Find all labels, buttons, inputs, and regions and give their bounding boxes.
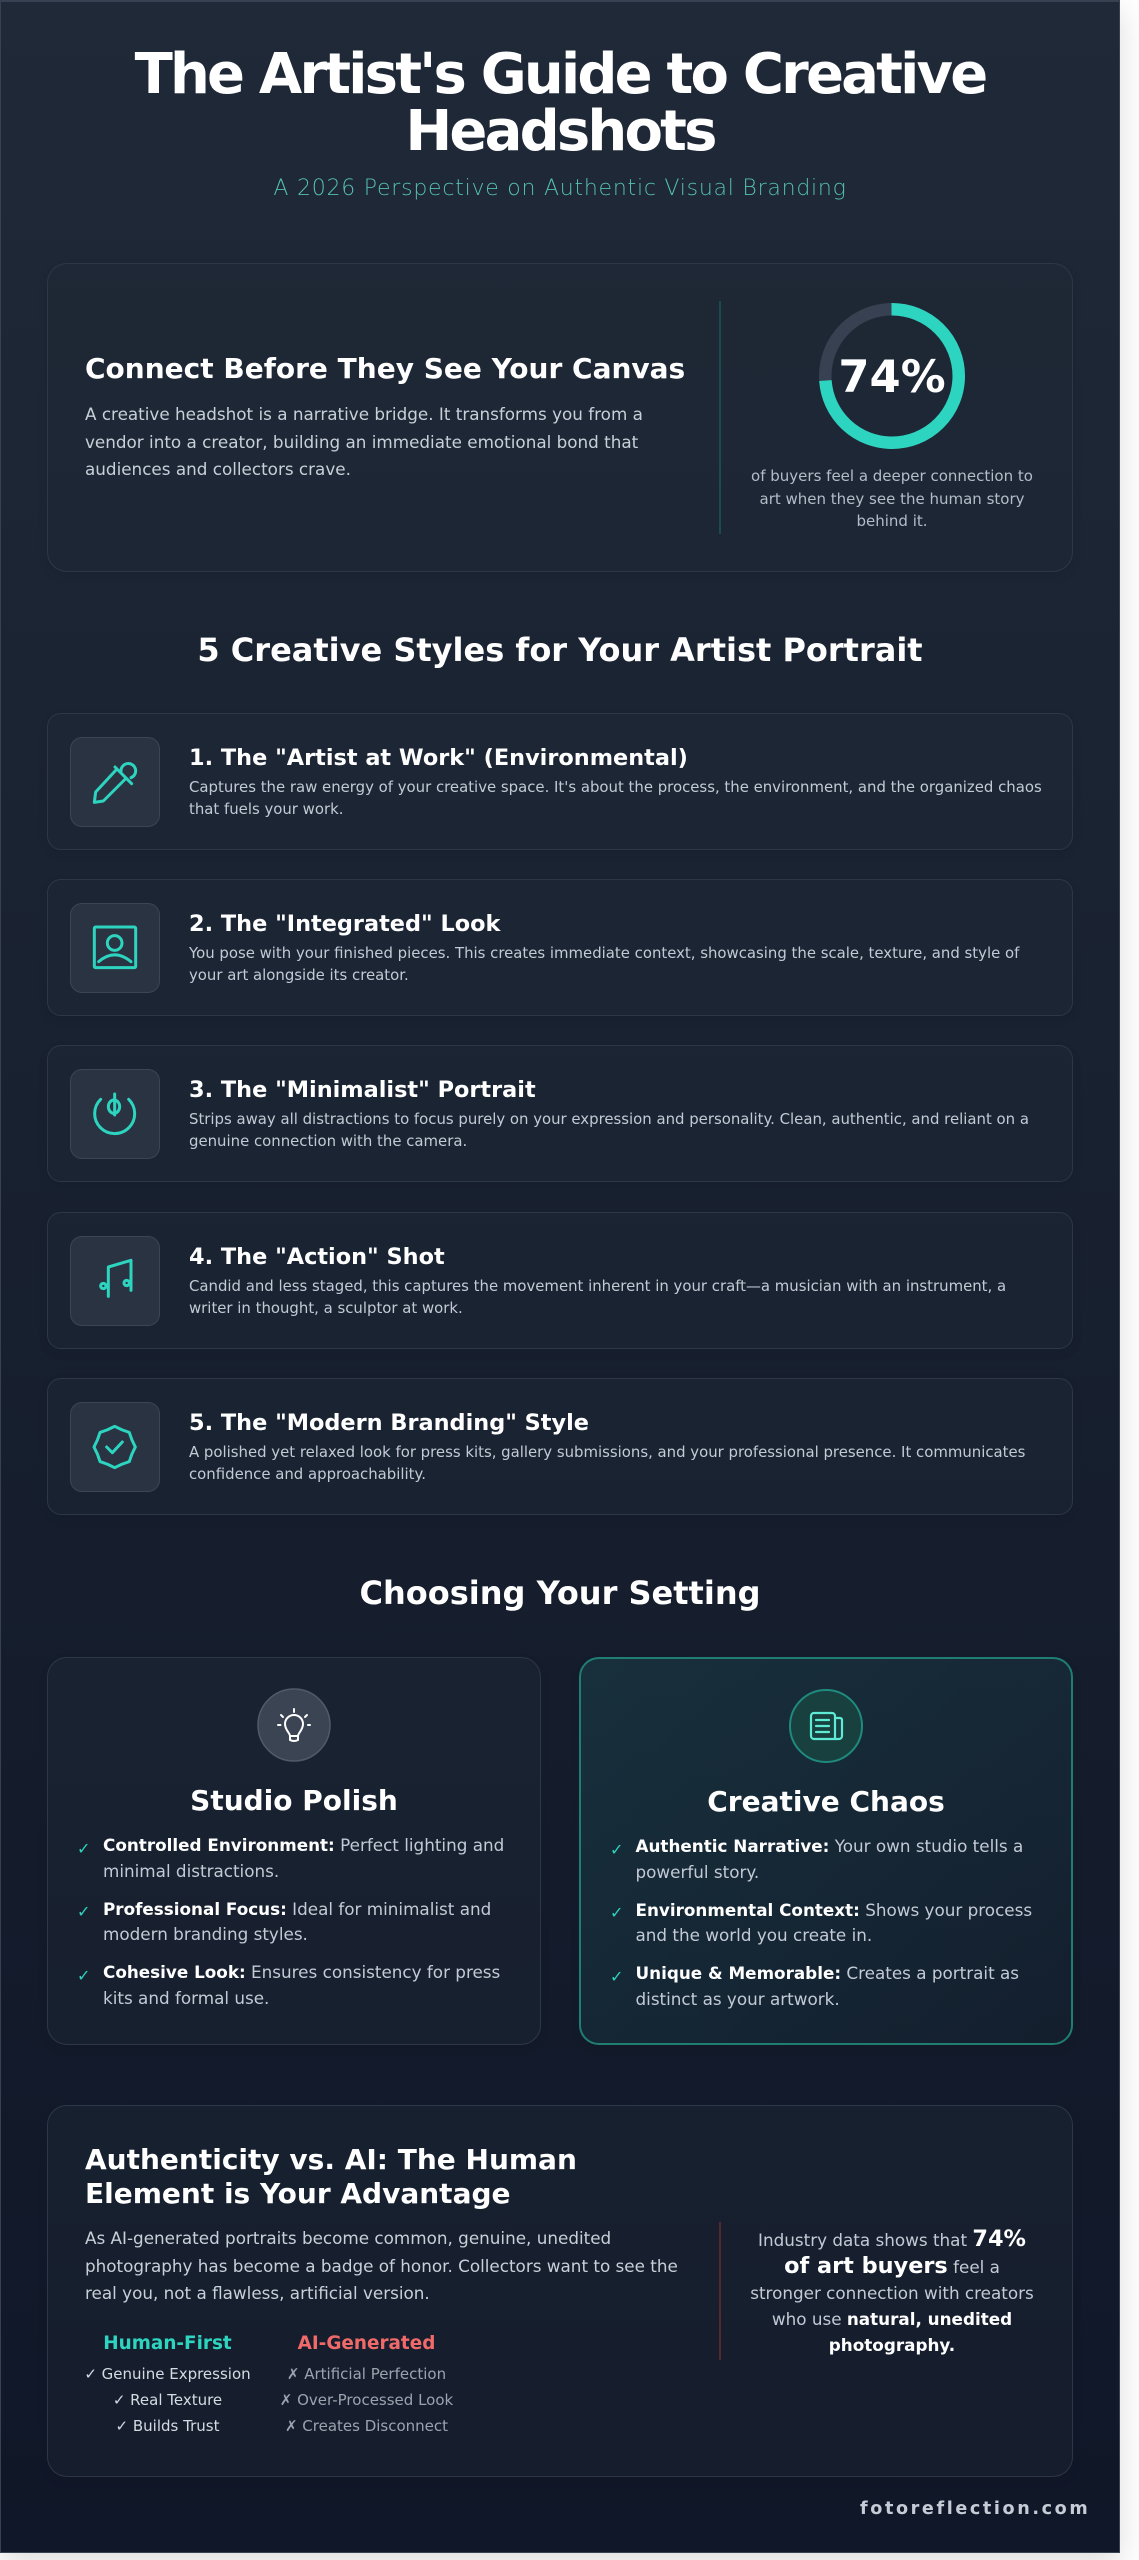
human-first list (84, 2365, 251, 2435)
chaos check 2: ✓ (610, 1903, 623, 1922)
stat caption: art when they see the human story (760, 490, 1024, 508)
style text 4: writer in thought, a sculptor at work. (189, 1299, 463, 1317)
style text 2: your art alongside its creator. (189, 966, 409, 984)
chaos list: Authentic Narrative: Your own studio tells a (636, 1836, 1023, 1856)
style card 5 (47, 1378, 1073, 1515)
human-first label: Human-First (103, 2333, 232, 2354)
authenticity text (85, 2228, 678, 2303)
divider (719, 301, 721, 534)
style title 5: 5. The "Modern Branding" Style (189, 1410, 589, 1436)
style text 4: Candid and less staged, this captures the movement inherent in your craft—a musician with an instrument, a (189, 1277, 1006, 1295)
heading: styles: 5 Creative Styles for Your Artist Portrait (197, 631, 923, 669)
style text 5: confidence and approachability. (189, 1465, 426, 1483)
human-first list: ✓ Builds Trust (116, 2417, 219, 2435)
authenticity heading: Authenticity vs. AI: The Human (85, 2143, 577, 2176)
intro text (85, 404, 643, 479)
authenticity text: photography has become a badge of honor. Collectors want to see the (85, 2256, 678, 2276)
intro text: A creative headshot is a narrative bridge. It transforms you from a (85, 404, 643, 424)
style title 3: 3. The "Minimalist" Portrait (189, 1077, 536, 1103)
style text 4 (189, 1277, 1006, 1317)
human-first list: ✓ Real Texture (113, 2391, 222, 2409)
chaos check 1: ✓ (610, 1840, 623, 1859)
style text 1: Captures the raw energy of your creative space. It's about the process, the environment, and the organized chaos (189, 778, 1042, 796)
red divider (719, 2222, 721, 2360)
intro text: vendor into a creator, building an immediate emotional bond that (85, 432, 638, 452)
icon: eyedropper (70, 737, 160, 827)
panel: creative chaos (579, 1657, 1073, 2045)
human-first list: ✓ Genuine Expression (84, 2365, 251, 2383)
title: Headshots (405, 99, 715, 164)
chaos list (636, 1836, 1032, 2009)
ai-generated list: ✗ Over-Processed Look (280, 2391, 453, 2409)
authenticity text: real you, not a flawless, artificial version. (85, 2283, 430, 2303)
stat caption (751, 467, 1033, 530)
stat caption: of buyers feel a deeper connection to (751, 467, 1033, 485)
authenticity heading (85, 2143, 577, 2210)
icon: light bulb (257, 1688, 331, 1762)
style card 1 (47, 713, 1073, 850)
style text 1: that fuels your work. (189, 800, 343, 818)
footer brand: fotoreflection.com (860, 2499, 1090, 2519)
stat value: 74% (838, 350, 946, 403)
ai stat callout: photography. (829, 2335, 955, 2355)
icon: newspaper (789, 1689, 863, 1763)
studio list: kits and formal use. (103, 1988, 269, 2008)
style title 4: 4. The "Action" Shot (189, 1244, 445, 1270)
ai-generated list: ✗ Artificial Perfection (287, 2365, 446, 2383)
studio check 2: ✓ (77, 1902, 90, 1921)
intro text: audiences and collectors crave. (85, 459, 351, 479)
icon: verified badge (70, 1402, 160, 1492)
style text 2 (189, 944, 1020, 984)
donut chart: 74% (819, 303, 965, 449)
studio list (103, 1835, 504, 2008)
chaos list: distinct as your artwork. (636, 1989, 840, 2009)
title (134, 42, 986, 164)
authenticity text: As AI-generated portraits become common, genuine, unedited (85, 2228, 611, 2248)
ai-generated label: AI-Generated (298, 2333, 435, 2354)
subtitle: A 2026 Perspective on Authentic Visual Branding (273, 176, 847, 201)
studio list: Controlled Environment: Perfect lighting and (103, 1835, 504, 1855)
comparison: human-first (84, 2333, 251, 2435)
chaos title: Creative Chaos (707, 1785, 945, 1818)
style text 5: A polished yet relaxed look for press kits, gallery submissions, and your professional presence. It communicates (189, 1443, 1025, 1461)
style card 3 (47, 1045, 1073, 1182)
ai-generated list: ✗ Creates Disconnect (285, 2417, 448, 2435)
icon: portrait frame (70, 903, 160, 993)
studio checks: ✓ (77, 1839, 90, 1858)
style text 3: genuine connection with the camera. (189, 1132, 467, 1150)
chaos list: powerful story. Environmental Context: Shows your process (636, 1862, 1032, 1920)
studio list: modern branding styles. Cohesive Look: Ensures consistency for press (103, 1924, 500, 1982)
title: The Artist's Guide to Creative (135, 42, 985, 107)
heading: setting: Choosing Your Setting (360, 1574, 760, 1612)
ai stat callout: who use natural, unedited (772, 2309, 1012, 2329)
style card 4 (47, 1212, 1073, 1349)
comparison: ai-generated (280, 2333, 453, 2435)
ai stat callout: stronger connection with creators (750, 2283, 1034, 2303)
chaos list: and the world you create in. Unique & Memorable: Creates a portrait as (636, 1925, 1019, 1983)
icon: music note (70, 1236, 160, 1326)
authenticity heading: Element is Your Advantage (85, 2177, 510, 2210)
style title 2: 2. The "Integrated" Look (189, 911, 500, 937)
ai stat callout: Industry data shows that 74% (758, 2226, 1026, 2252)
icon: minimalist power (70, 1069, 160, 1159)
panel: intro (47, 263, 1073, 572)
stat caption: behind it. (856, 512, 928, 530)
style card 2 (47, 879, 1073, 1016)
studio check 3: ✓ (77, 1966, 90, 1985)
chaos check 3: ✓ (610, 1967, 623, 1986)
panel: studio polish (47, 1657, 541, 2045)
studio list: minimal distractions. Professional Focus: Ideal for minimalist and (103, 1861, 491, 1919)
style text 3 (189, 1110, 1029, 1150)
style text 3: Strips away all distractions to focus purely on your expression and personality. Clean, authentic, and reliant on a (189, 1110, 1029, 1128)
panel: authenticity (47, 2105, 1073, 2477)
style title 1: 1. The "Artist at Work" (Environmental) (189, 745, 688, 771)
ai stat callout: of art buyers feel a (784, 2253, 1000, 2279)
style text 2: You pose with your finished pieces. This creates immediate context, showcasing the scale, texture, and style of (189, 944, 1019, 962)
ai-generated list (280, 2365, 453, 2435)
studio title: Studio Polish (190, 1784, 398, 1817)
ai stat callout (750, 2226, 1034, 2355)
style text 5 (189, 1443, 1025, 1483)
style text 1 (189, 778, 1042, 818)
intro heading: Connect Before They See Your Canvas (85, 352, 685, 385)
